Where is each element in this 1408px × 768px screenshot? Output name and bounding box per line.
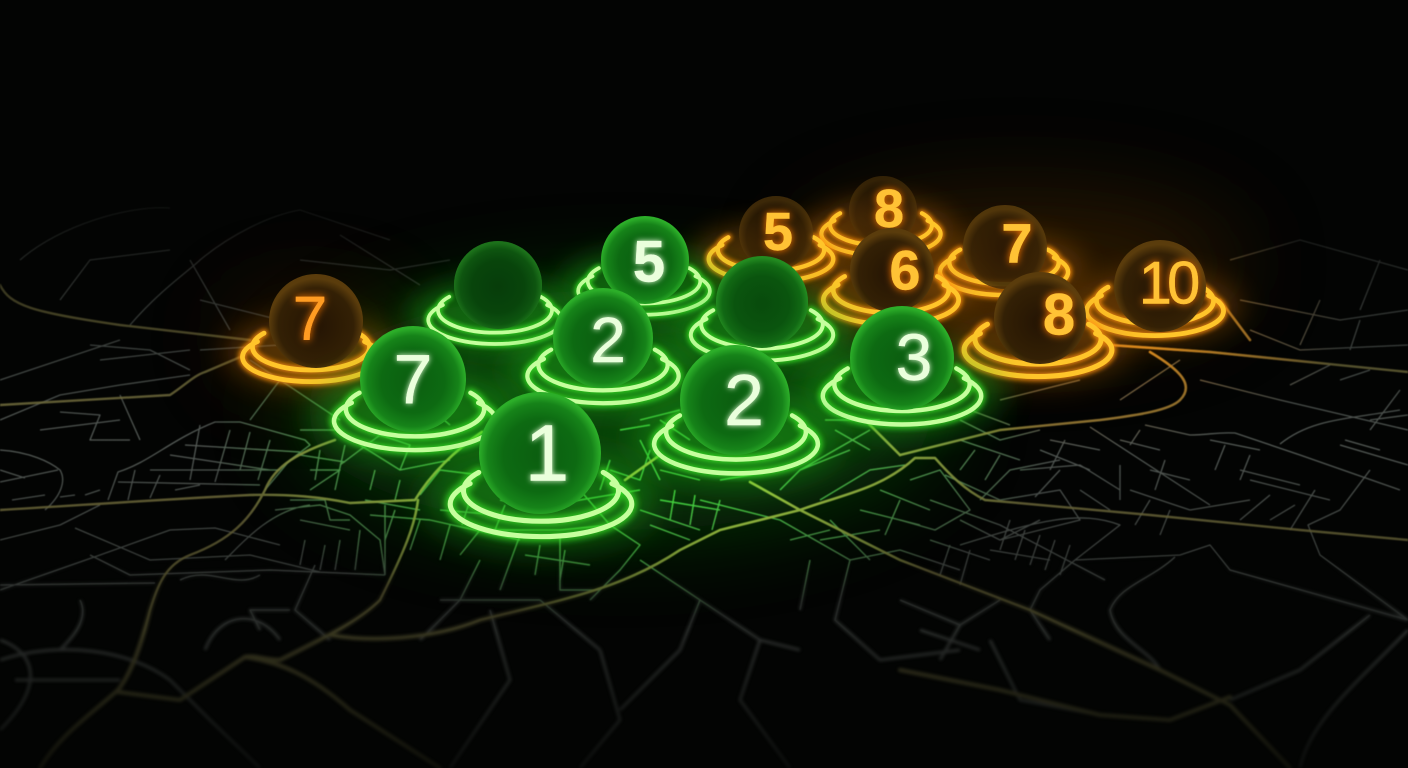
marker: green 3: 3 <box>896 320 932 394</box>
marker: green 7 <box>311 326 519 459</box>
marker: green 2 front: 2 <box>724 361 764 441</box>
marker: orange 6: 6 <box>889 238 921 302</box>
marker: orange 8 front: 8 <box>1043 282 1075 348</box>
marker: orange 10: 10 <box>1139 250 1199 316</box>
marker: green 3 <box>801 306 1003 433</box>
marker: orange 7 left: 7 <box>293 284 327 354</box>
marker: orange 10 <box>1069 240 1241 342</box>
marker: green 5: 5 <box>633 230 665 294</box>
marker: green 1 <box>425 392 657 547</box>
marker: orange 7 back <box>923 205 1085 301</box>
marker: green blank right <box>671 256 853 369</box>
marker: green 7: 7 <box>394 340 432 418</box>
scene: dark city map with glowing markers <box>0 162 1408 768</box>
marker: green 5 <box>560 216 728 322</box>
marker: green 1: 1 <box>525 408 569 498</box>
marker: orange 6 <box>806 228 976 330</box>
marker: orange 5 back <box>693 196 849 287</box>
marker: green 2 front <box>631 345 841 483</box>
marker: orange 5 back: 5 <box>763 202 793 262</box>
marker: orange 7 left <box>225 274 397 388</box>
marker: green 2 middle <box>506 288 700 412</box>
marker: orange 8 front <box>945 272 1131 383</box>
marker: orange 7 back: 7 <box>1001 212 1033 274</box>
marker: orange 8 back <box>806 176 956 261</box>
marker: green 2 middle: 2 <box>590 304 626 376</box>
marker: green blank left <box>410 241 580 352</box>
city map roads <box>0 208 1408 768</box>
ambient glow: green and orange halo on the ground <box>230 195 1240 530</box>
marker: orange 8 back: 8 <box>874 179 904 239</box>
